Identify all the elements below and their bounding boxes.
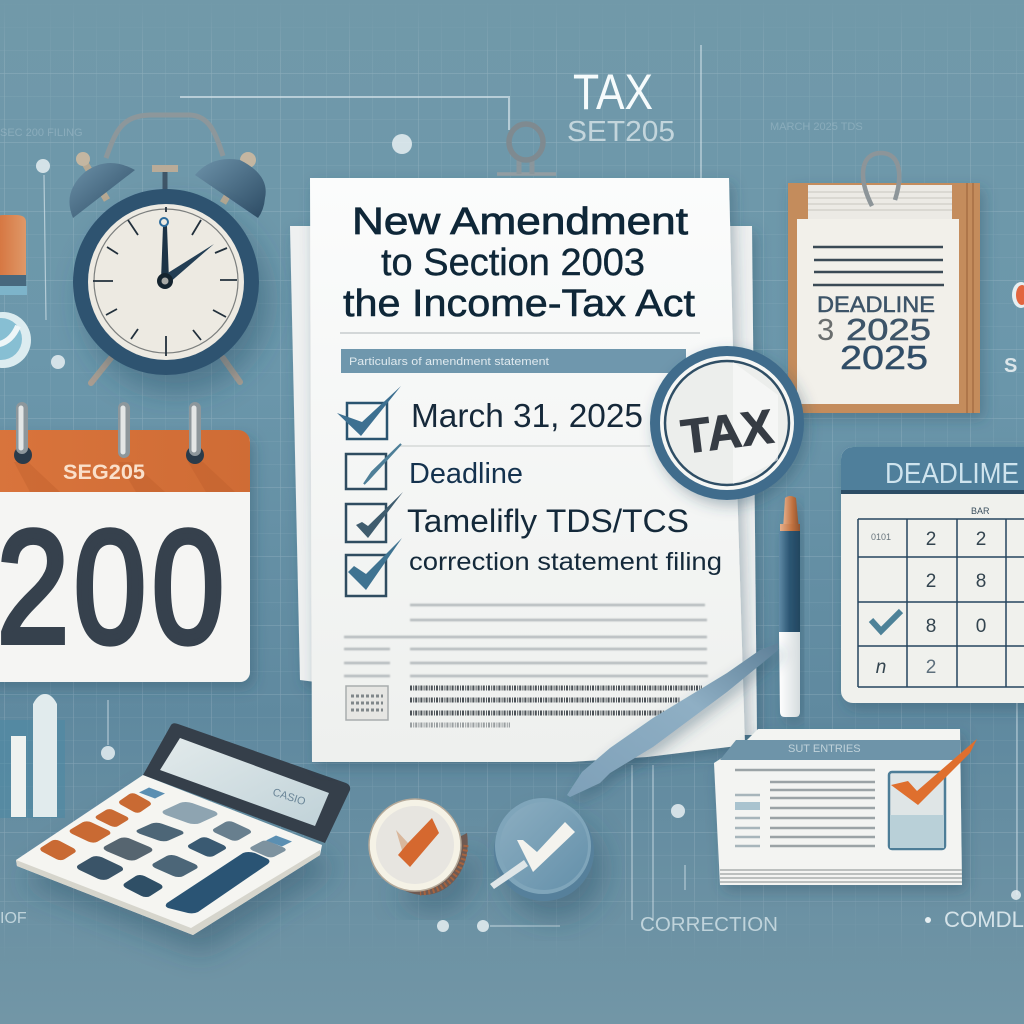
checklist item: correction statement filing: correction statement filing — [409, 548, 722, 576]
panel: right deadline calendar — [841, 447, 1024, 703]
bottom labels: COMDL — [944, 907, 1024, 932]
lower document body lines — [344, 605, 708, 676]
document fine print — [410, 688, 702, 725]
clipboard text: DEADLINE — [817, 292, 935, 317]
icon: orange check coin — [369, 799, 468, 895]
clock hands — [161, 226, 169, 280]
clock ticks — [93, 207, 237, 356]
clipboard text: 2025 — [840, 339, 928, 376]
calendar heading: SEG205 — [63, 461, 145, 484]
faint background labels: MARCH 2025 TDS — [770, 121, 863, 133]
icon: round check badge — [0, 312, 31, 368]
card page edges — [720, 870, 962, 882]
icon: alarm clock — [69, 115, 266, 383]
card header band — [720, 740, 960, 760]
document title: to Section 2003 — [381, 242, 645, 284]
calendar cell values: 2 — [976, 529, 986, 550]
calendar cell values: 0 — [976, 616, 986, 637]
calculator body — [16, 775, 322, 935]
panel: right deadline calendar: BAR — [971, 506, 990, 516]
icon: deadline clipboard — [788, 153, 980, 413]
bottom labels: IOF — [0, 910, 27, 927]
document title — [343, 201, 695, 325]
checklist item: TDS/TCS — [346, 492, 689, 542]
section band — [341, 349, 686, 373]
panel: main document — [310, 178, 745, 762]
top label: TAX — [567, 64, 675, 148]
icon: calculator: CASIO — [271, 786, 307, 808]
faint background labels: SEC 200 FILING — [0, 127, 83, 139]
icon: magnifying glass with TAX — [650, 346, 804, 500]
clipboard text: 3 — [817, 312, 834, 347]
top label: TAX: SET205 — [567, 116, 675, 148]
icon: top paper clip — [497, 124, 556, 174]
calendar cell values — [871, 529, 986, 678]
calculator screen — [160, 738, 329, 826]
clock bells — [69, 159, 266, 218]
clipboard text — [817, 292, 935, 376]
icon: orange cylinder — [0, 215, 27, 295]
card text lines — [735, 770, 875, 846]
panel: summary card: SUT ENTRIES — [788, 743, 861, 755]
calendar cell values: 2 — [926, 657, 936, 678]
clipboard sheet — [797, 219, 959, 404]
icon: right edge markers: S — [1004, 355, 1017, 377]
calendar check mark — [871, 611, 901, 631]
clipboard stacked sheets — [808, 185, 952, 220]
faint background labels — [0, 121, 863, 139]
document title: the Income-Tax Act — [343, 283, 695, 325]
checklist item: Deadline: Deadline — [409, 458, 523, 490]
clock handle — [106, 115, 223, 158]
clipboard clip — [863, 153, 899, 206]
section band: Particulars of amendment statement — [349, 356, 549, 368]
panel: summary card — [714, 729, 977, 885]
calendar cell values: 8 — [926, 616, 936, 637]
checklist item: TDS/TCS: Tamelifly TDS/TCS — [407, 503, 689, 539]
bottom labels: CORRECTION — [640, 914, 778, 936]
calculator display housing — [143, 723, 350, 843]
calendar cell values: 0101 — [871, 532, 891, 542]
bottom labels — [0, 907, 1024, 936]
calendar header — [841, 447, 1024, 493]
clock knobs and stems — [83, 160, 248, 203]
checklist item: March 31, 2025 — [337, 386, 643, 439]
calendar number — [0, 497, 224, 676]
calculator orange keys — [38, 792, 153, 862]
calculator small labels — [139, 788, 165, 798]
calendar cell values: 8 — [976, 571, 986, 592]
clipboard text: 2025 — [846, 312, 931, 347]
icon: right edge markers — [1004, 282, 1024, 377]
icon: magnifying glass with TAX: TAX — [678, 401, 776, 464]
icon: diagonal pen — [567, 643, 778, 797]
calendar cell values: n — [876, 657, 886, 678]
panel: left calendar — [0, 408, 250, 682]
panel: back paper sheets — [290, 226, 757, 735]
document title: New Amendment — [352, 201, 688, 243]
top label: TAX: TAX — [573, 64, 653, 120]
document stamp thumbnail — [346, 686, 388, 720]
calendar rings — [14, 446, 204, 464]
checklist item: correction statement filing — [346, 538, 722, 596]
icon: blue check coin — [490, 798, 594, 901]
clock feet — [91, 358, 240, 383]
calculator dark keys — [74, 800, 288, 913]
calendar cell values: 2 — [926, 529, 936, 550]
calendar grid — [858, 519, 1024, 687]
icon: vertical pen — [779, 496, 800, 717]
calendar number: 0 — [152, 497, 224, 676]
icon: bar chart — [0, 694, 65, 818]
card check box — [889, 772, 945, 849]
calendar ring shadows — [14, 462, 235, 492]
calendar cell values: 2 — [926, 571, 936, 592]
checklist item: Deadline — [346, 444, 523, 490]
checklist item: March 31, 2025: March 31, 2025 — [411, 397, 643, 434]
orange check mark — [891, 739, 977, 805]
icon: calculator — [16, 723, 350, 935]
calendar number: 0 — [74, 497, 146, 676]
